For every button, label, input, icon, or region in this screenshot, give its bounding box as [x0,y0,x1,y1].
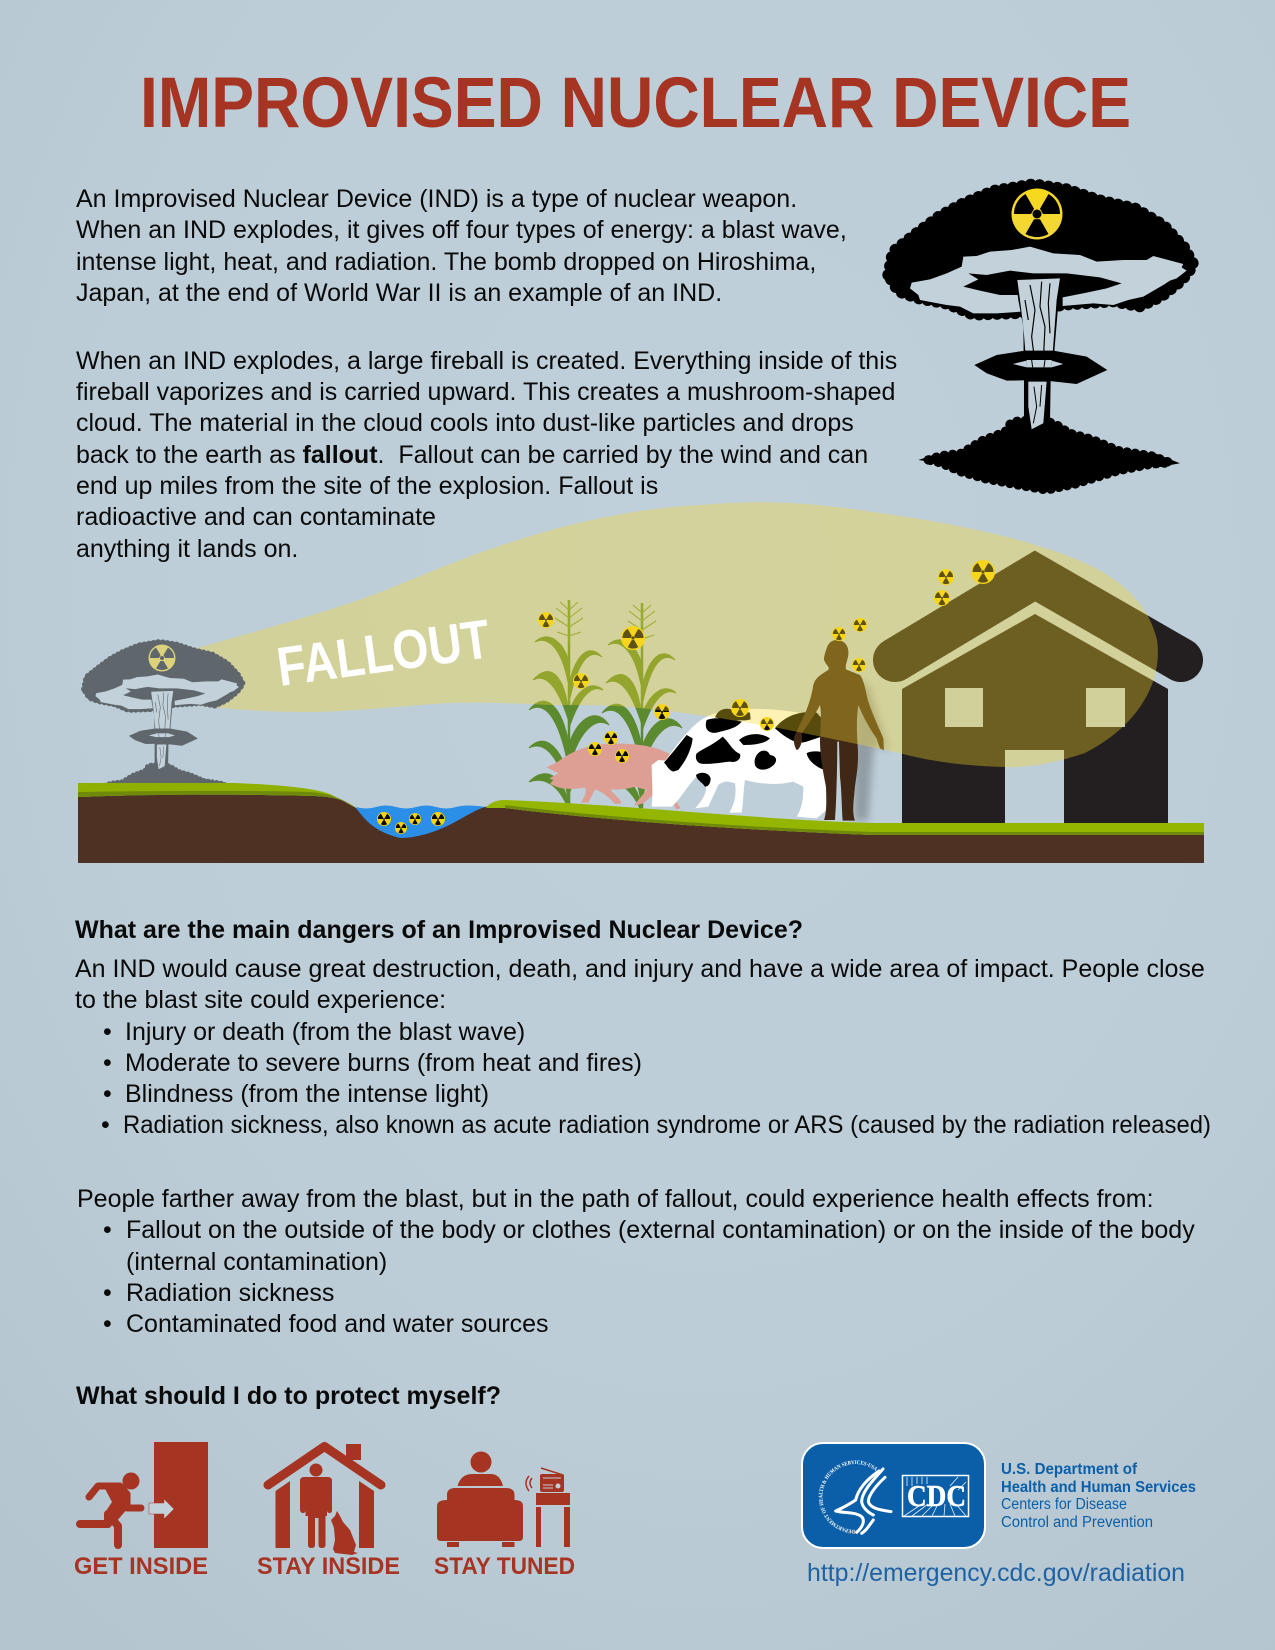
organization text: U.S. Department of [1001,1461,1138,1478]
dangers text: farther away [77,1185,1195,1338]
dangers text: close to blast: An IND would cause great destruction, death, and injury and have a wide area of impact. People close [75,955,1205,983]
dangers text: close to blast: to the blast site could experience: [75,986,446,1014]
dangers text: farther away: Fallout on the outside of the body or clothes (external contamination) or on the inside of the body [126,1216,1195,1244]
dangers text: farther away: Contaminated food and water sources [126,1310,548,1338]
fireball paragraph: end up miles from the site of the explosion. Fallout is [76,472,658,500]
intro paragraph: Japan, at the end of World War II is an example of an IND. [76,279,722,307]
house [895,576,1181,823]
dangers text: close to blast: • [103,1018,112,1046]
ground [78,783,1204,863]
title: IMPROVISED NUCLEAR DEVICE [140,64,1131,143]
organization text: Health and Human Services [1001,1479,1196,1496]
logo: HHS and CDC: CDC [907,1478,966,1513]
cow [652,709,827,818]
icon: stay inside [268,1444,381,1555]
CDC box [902,1476,968,1516]
fireball paragraph: fireball vaporizes and is carried upward. This creates a mushroom-shaped [76,378,895,406]
icon: stay tuned [437,1452,570,1547]
water [356,806,486,845]
dangers text: close to blast: • [103,1080,112,1108]
organization text [1001,1461,1196,1531]
intro paragraph: An Improvised Nuclear Device (IND) is a type of nuclear weapon. [76,185,797,213]
dangers text: close to blast: Radiation sickness, also known as acute radiation syndrome or ARS (caused by the radiation released) [123,1111,1211,1139]
dangers text: farther away: • [103,1310,112,1338]
person shadow [852,680,888,821]
dangers text: close to blast: Injury or death (from the blast wave) [125,1018,525,1046]
dangers text: farther away: People farther away from the blast, but in the path of fallout, could experience health effects from: [77,1185,1154,1213]
dangers text: close to blast: Blindness (from the intense light) [125,1080,489,1108]
fallout label: FALLOUT [273,607,494,698]
label: stay inside: STAY INSIDE [257,1553,400,1580]
label: get inside: GET INSIDE [74,1553,208,1580]
website url: http://emergency.cdc.gov/radiation [807,1559,1185,1587]
seal text [822,1464,880,1530]
fallout plume [190,502,1158,767]
intro paragraph: intense light, heat, and radiation. The bomb dropped on Hiroshima, [76,248,816,276]
illustration: fallout scene [78,502,1204,863]
small mushroom cloud [84,642,243,801]
dangers text: farther away: (internal contamination) [126,1248,387,1276]
icon: large mushroom cloud [888,184,1194,490]
pig [547,744,681,809]
fireball paragraph: back to the earth as fallout. Fallout can be carried by the wind and can [76,441,868,469]
water particles [377,812,445,834]
logo: HHS and CDC [801,1442,986,1549]
small pig particles [588,731,629,763]
dangers text: farther away: Radiation sickness [126,1279,334,1307]
fireball paragraph: When an IND explodes, a large fireball is created. Everything inside of this [76,347,897,375]
organization text: Control and Prevention [1001,1514,1153,1531]
corn stalks [529,600,682,811]
dangers text: close to blast [75,955,1211,1139]
dangers text: close to blast: • [103,1049,112,1077]
dangers text: farther away: • [103,1279,112,1307]
radiation particles [538,560,995,731]
label: stay tuned: STAY TUNED [434,1553,575,1580]
dangers text: close to blast: Moderate to severe burns (from heat and fires) [125,1049,642,1077]
dangers text: farther away: • [103,1216,112,1244]
fireball paragraph [76,347,897,563]
eagle [836,1469,891,1533]
logo: HHS and CDC: DEPARTMENT OF HEALTH & HUMAN SERVICES·USA [818,1460,877,1534]
heading: protect: What should I do to protect myself? [76,1382,501,1410]
intro paragraph: When an IND explodes, it gives off four types of energy: a blast wave, [76,216,847,244]
organization text: Centers for Disease [1001,1496,1127,1513]
fireball paragraph: cloud. The material in the cloud cools into dust-like particles and drops [76,409,854,437]
heading: dangers: What are the main dangers of an Improvised Nuclear Device? [75,916,803,944]
intro paragraph [76,185,847,307]
fireball paragraph: anything it lands on. [76,535,298,563]
person [794,640,884,821]
fireball paragraph: radioactive and can contaminate [76,503,436,531]
icon: get inside [80,1442,208,1548]
dangers text: close to blast: • [101,1111,110,1139]
